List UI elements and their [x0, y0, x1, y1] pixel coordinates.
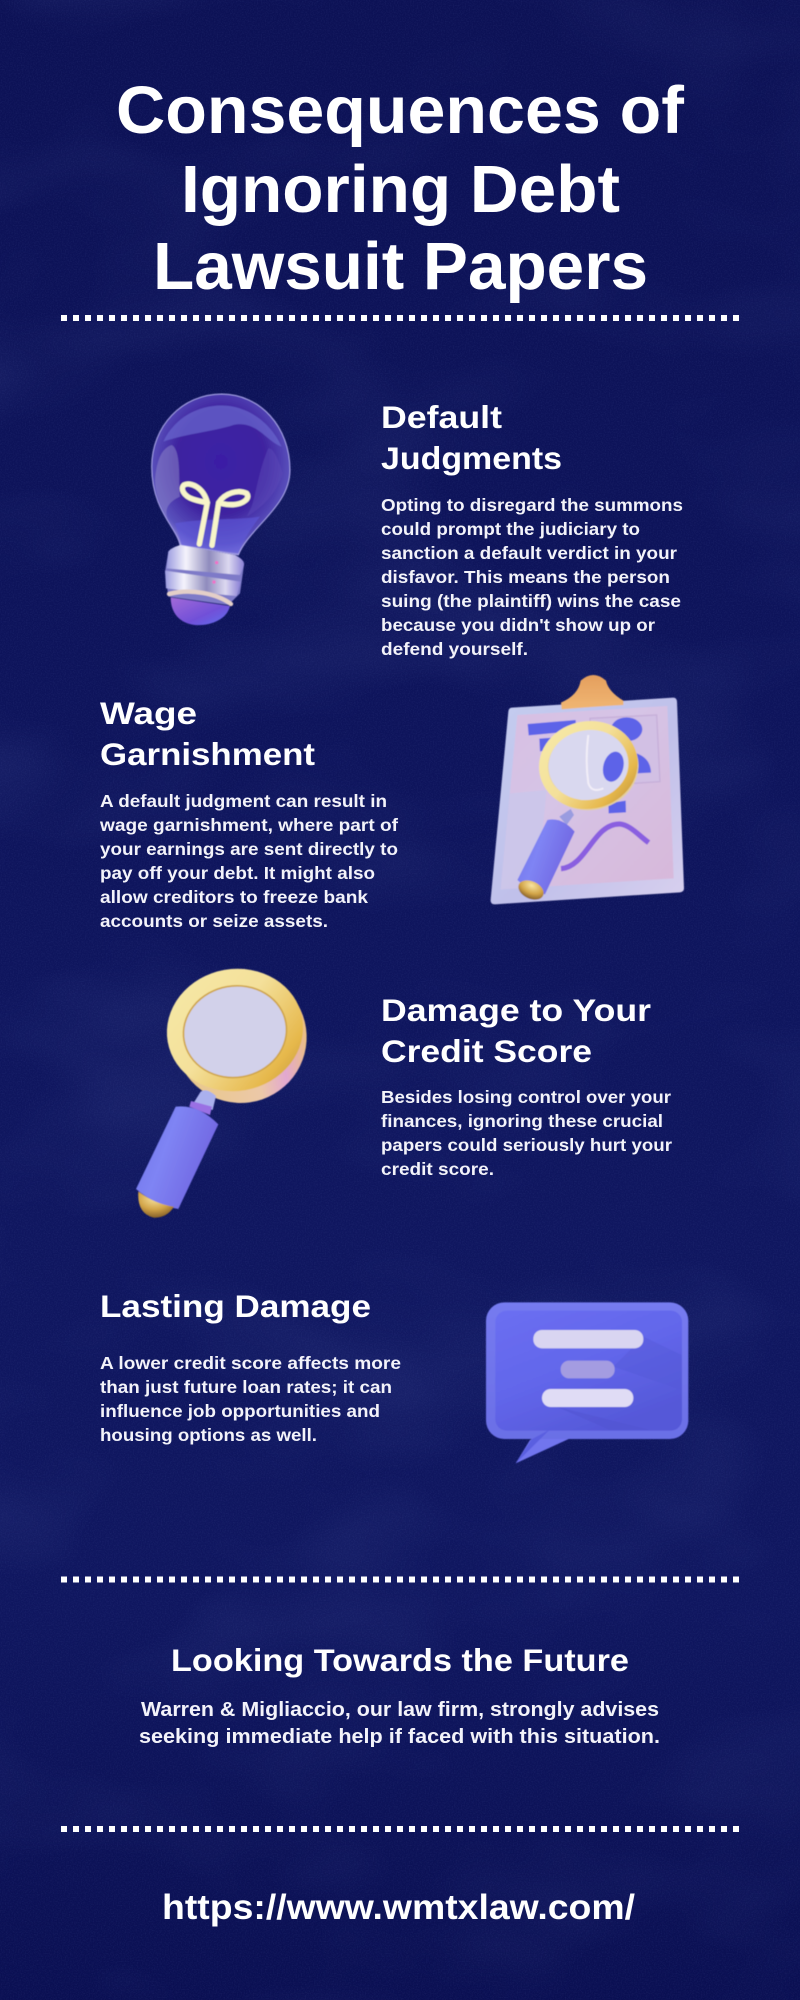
panel: Lasting Damage	[100, 1288, 401, 1445]
clipboard board	[491, 698, 684, 904]
body text	[100, 1353, 401, 1445]
panel: Looking Towards the Future	[139, 1642, 660, 1748]
heading: Default	[381, 399, 503, 435]
panel: Default Judgments	[381, 399, 683, 659]
icon: light bulb	[152, 394, 290, 625]
body text: housing options as well.	[100, 1425, 317, 1445]
body text: your earnings are sent directly to	[100, 839, 398, 859]
icon: magnifying glass	[136, 958, 315, 1218]
body text: than just future loan rates; it can	[100, 1377, 392, 1397]
body text: A lower credit score affects more	[100, 1353, 401, 1373]
heading: Damage to Your	[381, 992, 651, 1028]
body text: allow creditors to freeze bank	[100, 887, 368, 907]
body text: could prompt the judiciary to	[381, 519, 640, 539]
body text	[381, 1087, 672, 1179]
body text: wage garnishment, where part of	[99, 815, 398, 835]
magnifier handle	[559, 809, 574, 825]
trend line	[561, 824, 649, 869]
body text: disfavor. This means the person	[381, 567, 670, 587]
heading: Looking Towards the Future	[171, 1642, 629, 1678]
lens	[176, 978, 294, 1086]
heading: Wage	[100, 695, 197, 731]
bulb glass	[152, 394, 290, 555]
heading	[381, 992, 651, 1069]
body text: suing (the plaintiff) wins the case	[381, 591, 681, 611]
glass rim side	[166, 963, 315, 1112]
title	[116, 73, 685, 304]
body text: influence job opportunities and	[100, 1401, 380, 1421]
body text: Opting to disregard the summons	[381, 495, 683, 515]
body text: Besides losing control over your	[381, 1087, 671, 1107]
bar bottom	[542, 1389, 633, 1407]
handle grip	[136, 1106, 218, 1209]
clip	[561, 675, 623, 709]
body text: A default judgment can result in	[100, 791, 387, 811]
bar middle	[561, 1361, 615, 1378]
icon: clipboard with magnifier	[491, 675, 684, 904]
body text: papers could seriously hurt your	[381, 1135, 672, 1155]
heading: Lasting Damage	[100, 1288, 371, 1324]
paper sheet	[501, 706, 674, 889]
body text: because you didn't show up or	[381, 615, 655, 635]
body text	[99, 791, 398, 931]
body text: defend yourself.	[381, 639, 528, 659]
body text: finances, ignoring these crucial	[381, 1111, 663, 1131]
body text: sanction a default verdict in your	[381, 543, 677, 563]
bubble tail	[516, 1428, 572, 1463]
bubble face	[495, 1311, 682, 1431]
body text: pay off your debt. It might also	[100, 863, 375, 883]
body text: accounts or seize assets.	[100, 911, 328, 931]
heading: Credit Score	[381, 1033, 592, 1069]
handle tip	[138, 1191, 174, 1218]
gold ring	[157, 958, 313, 1102]
body text: seeking immediate help if faced with this situation.	[139, 1726, 660, 1748]
title: Consequences of	[116, 73, 685, 148]
heading	[381, 399, 562, 476]
magnifier lens	[535, 717, 645, 818]
bar top	[533, 1330, 643, 1348]
panel: Wage Garnishment	[99, 695, 398, 931]
screw base	[165, 552, 244, 605]
body text: Warren & Migliaccio, our law firm, strongly advises	[141, 1699, 659, 1721]
body text	[139, 1699, 660, 1748]
handle neck	[193, 1090, 216, 1110]
icon: speech bubble	[486, 1302, 688, 1463]
title: Ignoring Debt	[181, 152, 620, 227]
heading	[100, 695, 316, 772]
chart shapes	[528, 717, 651, 813]
url: https://www.wmtxlaw.com/	[162, 1888, 635, 1927]
body text: credit score.	[381, 1159, 494, 1179]
heading: Judgments	[381, 440, 562, 476]
filament	[182, 484, 248, 545]
bubble body	[486, 1302, 688, 1439]
body text	[381, 495, 683, 659]
heading: Garnishment	[100, 736, 316, 772]
magnifier ring	[537, 718, 639, 812]
panel: Damage to Your Credit Score	[381, 992, 672, 1179]
title: Lawsuit Papers	[153, 229, 648, 304]
